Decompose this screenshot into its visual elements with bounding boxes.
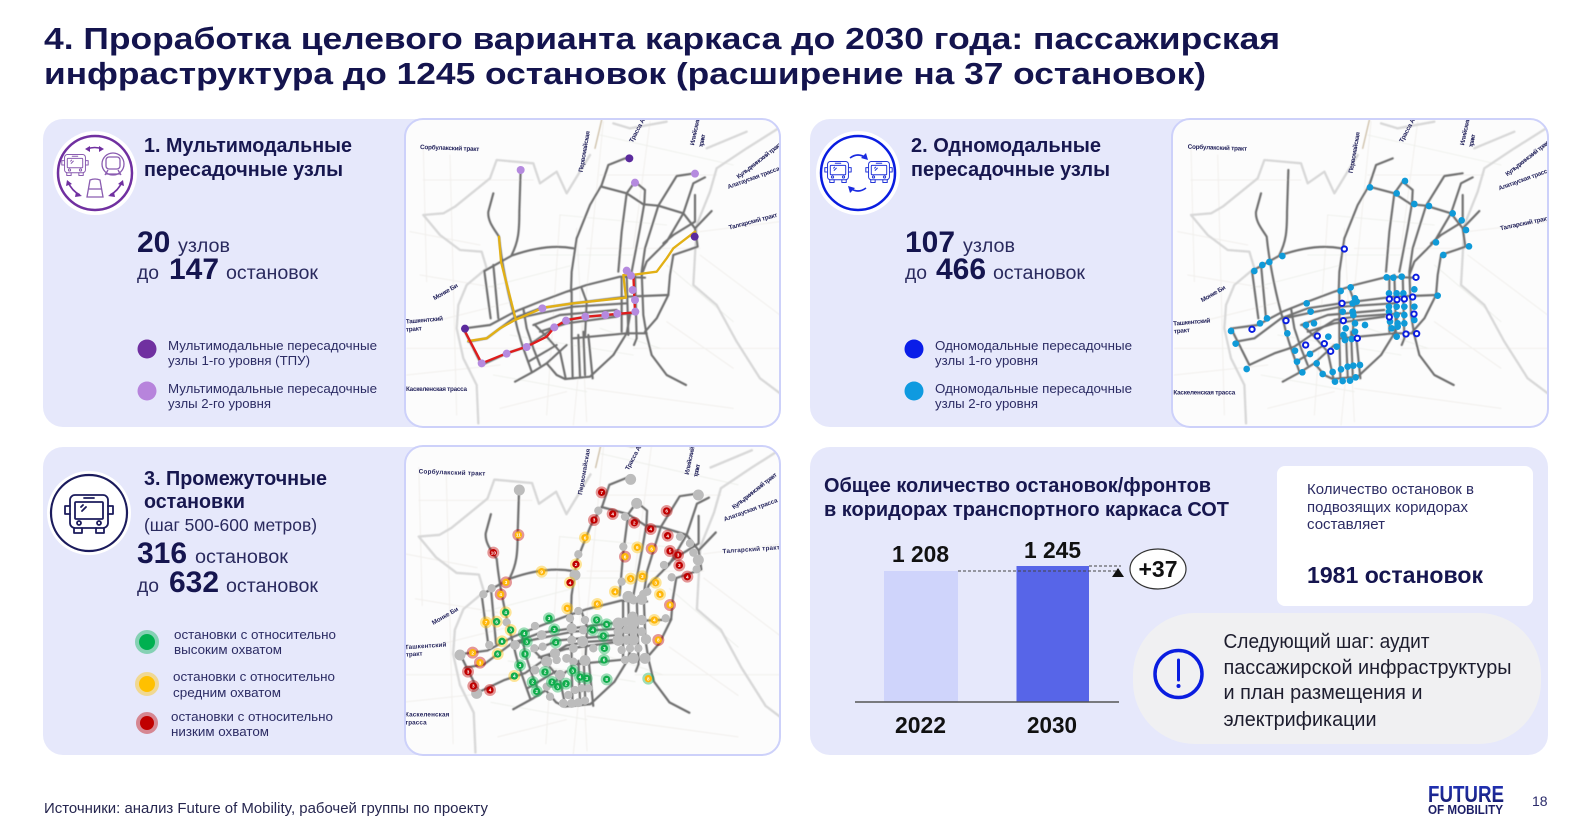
key numbers xyxy=(137,537,319,599)
callout: feeder corridors: составляет xyxy=(1307,517,1385,533)
coverage stops: 3 xyxy=(553,627,556,632)
coverage stops: 4 xyxy=(686,574,689,579)
coverage stops: 4 xyxy=(666,533,669,538)
road labels: Ташкентский xyxy=(405,640,447,651)
icon: single-mode hub xyxy=(816,131,900,215)
legend xyxy=(904,338,1132,411)
callout: feeder corridors: Количество остановок в xyxy=(1307,482,1474,498)
legend xyxy=(139,627,336,739)
road labels: Трасса Ал xyxy=(628,114,649,144)
coverage stops: 4 xyxy=(523,631,526,636)
coverage stops: 6 xyxy=(584,535,587,540)
heading: 1. Мультимодальные xyxy=(144,135,352,157)
legend: остановки с относительно xyxy=(174,627,336,642)
road labels: Первомайская xyxy=(576,448,592,495)
map: intermediate stops xyxy=(402,438,786,755)
coverage stops: 4 xyxy=(591,628,594,633)
callout: feeder corridors: 1981 остановок xyxy=(1307,562,1483,588)
legend: Мультимодальные пересадочные xyxy=(168,338,377,353)
road labels: Сорбулакский тракт xyxy=(419,467,486,478)
key numbers: узлов xyxy=(178,236,230,257)
road labels: Илийский xyxy=(683,446,697,475)
legend: высоким охватом xyxy=(174,642,282,657)
legend: остановки с относительно xyxy=(171,709,333,724)
coverage stops: 6 xyxy=(603,658,606,663)
key numbers: 147 xyxy=(169,253,219,286)
panel: single-mode hubs xyxy=(810,114,1552,427)
road labels: тракт xyxy=(1468,134,1477,148)
coverage stops: 2 xyxy=(633,520,636,525)
callout: next step: пассажирской инфраструктуры xyxy=(1224,657,1512,679)
road labels: Алатауская трасса xyxy=(727,165,781,191)
road labels: Сорбулакский тракт xyxy=(420,143,480,153)
level 2 hubs xyxy=(1228,178,1472,385)
heading: (шаг 500-600 метров) xyxy=(144,515,317,535)
road labels: Монке Би xyxy=(432,282,459,302)
key numbers: 632 xyxy=(169,566,219,599)
callout: feeder corridors: подвозящих коридорах xyxy=(1307,500,1469,516)
road labels: Трасса Ал xyxy=(1398,114,1419,144)
bar chart: 1 208 xyxy=(892,541,949,567)
key numbers: остановок xyxy=(226,576,319,597)
key numbers: до xyxy=(137,576,159,597)
bar chart: 1 245 xyxy=(1024,537,1081,563)
map: multimodal hubs xyxy=(405,114,783,427)
coverage stops: 2 xyxy=(551,680,554,685)
road labels: Талгарский тракт xyxy=(728,211,778,232)
page number: 18 xyxy=(1532,793,1548,809)
heading: пересадочные узлы xyxy=(911,159,1110,181)
coverage stops: 6 xyxy=(501,639,504,644)
key numbers: 107 xyxy=(905,226,955,259)
road labels: Каскеленская трасса xyxy=(406,386,467,393)
coverage stops: 3 xyxy=(571,668,574,673)
coverage stops: 3 xyxy=(677,553,680,558)
coverage stops: 2 xyxy=(531,680,534,685)
coverage stops: 5 xyxy=(595,618,598,623)
road labels: Монке Би xyxy=(431,606,460,627)
coverage stops: 3 xyxy=(472,684,475,689)
coverage stops: 6 xyxy=(495,619,498,624)
coverage stops: 10 xyxy=(491,550,496,555)
coverage stops: 4 xyxy=(554,640,557,645)
panel: multimodal hubs xyxy=(43,114,783,427)
key numbers: до xyxy=(137,263,159,284)
icon: exclamation xyxy=(1155,650,1202,698)
road labels: Сорбулакский тракт xyxy=(1188,143,1247,153)
coverage stops: 5 xyxy=(605,622,608,627)
heading xyxy=(911,135,1110,181)
road labels: Илийский xyxy=(688,117,702,146)
road labels: Талгарский тракт xyxy=(722,543,780,555)
road labels: тракт xyxy=(406,651,423,659)
road labels xyxy=(1173,114,1552,396)
road labels: тракт xyxy=(1174,327,1190,335)
coverage stops: 8 xyxy=(657,638,660,643)
key numbers: 316 xyxy=(137,537,187,570)
coverage stops: 3 xyxy=(678,563,681,568)
key numbers xyxy=(905,226,1086,286)
coverage stops: 6 xyxy=(624,554,627,559)
hubs xyxy=(461,154,699,367)
road labels: Первомайская xyxy=(577,130,592,173)
coverage stops: 2 xyxy=(544,670,547,675)
callout: next step: электрификации xyxy=(1224,709,1376,731)
road labels: Монке Би xyxy=(1200,284,1227,304)
key numbers: остановок xyxy=(226,263,319,284)
road labels: Каскеленская трасса xyxy=(1173,389,1236,396)
heading: Общее количество остановок/фронтов xyxy=(824,475,1211,497)
key numbers xyxy=(137,226,319,286)
coverage stops: 4 xyxy=(569,580,572,585)
road labels xyxy=(405,114,783,393)
coverage stops: 3 xyxy=(519,663,522,668)
coverage stops: 2 xyxy=(535,689,538,694)
heading xyxy=(144,468,327,535)
panel: total stops xyxy=(810,447,1548,755)
bar chart: 2022 xyxy=(895,712,946,738)
road labels: Трасса Ал xyxy=(624,442,645,472)
road labels: Илийский xyxy=(1458,117,1472,146)
legend: Одномодальные пересадочные xyxy=(935,381,1132,396)
key numbers: до xyxy=(905,263,927,284)
bar chart: 2030 xyxy=(1027,712,1077,738)
coverage stops: 3 xyxy=(467,669,470,674)
road labels: Кульджинский тракт xyxy=(730,471,779,511)
callout: next step xyxy=(1133,613,1541,744)
coverage stops: 4 xyxy=(653,618,656,623)
heading xyxy=(144,135,352,181)
coverage stops: 6 xyxy=(636,545,639,550)
coverage stops: 6 xyxy=(650,546,653,551)
road labels: Ташкентский xyxy=(1173,316,1211,328)
delta callout: +37 xyxy=(1138,556,1178,582)
coverage stops: 5 xyxy=(659,592,662,597)
road labels xyxy=(405,442,780,727)
heading: 3. Промежуточные xyxy=(144,468,327,490)
coverage stops: 9 xyxy=(540,569,543,574)
coverage stops: 4 xyxy=(579,675,582,680)
key numbers: 20 xyxy=(137,226,170,259)
coverage stops: 5 xyxy=(669,549,672,554)
coverage stops: 2 xyxy=(565,681,568,686)
coverage stops: 6 xyxy=(496,652,499,657)
coverage stops: 3 xyxy=(525,639,528,644)
coverage stops: 4 xyxy=(611,512,614,517)
coverage stops: 3 xyxy=(602,634,605,639)
road labels: трасса xyxy=(405,720,427,727)
level 1 hubs xyxy=(1249,246,1419,354)
legend: узлы 2-го уровня xyxy=(935,396,1038,411)
callout: feeder corridors xyxy=(1277,466,1533,606)
coverage stops: 2 xyxy=(575,562,578,567)
coverage stops: 3 xyxy=(479,660,482,665)
coverage stops: 3 xyxy=(556,684,559,689)
heading: остановки xyxy=(144,491,245,513)
legend: узлы 2-го уровня xyxy=(168,396,271,411)
legend: остановки с относительно xyxy=(173,669,335,684)
coverage stops: 3 xyxy=(593,518,596,523)
heading: пересадочные узлы xyxy=(144,159,343,181)
key numbers: узлов xyxy=(963,236,1015,257)
coverage stops: 3 xyxy=(629,576,632,581)
title: инфраструктура до 1245 остановок (расширение на 37 остановок) xyxy=(44,56,1206,91)
road labels: Первомайская xyxy=(1347,131,1362,174)
legend: Одномодальные пересадочные xyxy=(935,338,1132,353)
callout: next step: Следующий шаг: аудит xyxy=(1224,631,1430,653)
coverage stops: 6 xyxy=(596,602,599,607)
coverage stops: 8 xyxy=(669,603,672,608)
delta callout xyxy=(1112,549,1186,589)
legend xyxy=(138,338,377,411)
road labels: Талгарский тракт xyxy=(1499,214,1550,232)
key numbers: 466 xyxy=(936,253,986,286)
road labels: Алатауская трасса xyxy=(723,497,779,523)
callout: next step: и план размещения и xyxy=(1224,682,1422,704)
coverage stops: 3 xyxy=(641,574,644,579)
road labels: тракт xyxy=(692,463,702,478)
coverage stops: 2 xyxy=(471,650,474,655)
coverage stops: 3 xyxy=(505,580,508,585)
heading: 2. Одномодальные xyxy=(911,135,1101,157)
heading xyxy=(824,475,1229,521)
title xyxy=(44,21,1280,91)
logo: FUTURE xyxy=(1428,781,1504,807)
coverage stops: 3 xyxy=(603,646,606,651)
coverage stops: 4 xyxy=(499,592,502,597)
sources: Источники: анализ Future of Mobility, рабочей группы по проекту xyxy=(44,801,489,817)
coverage stops: 3 xyxy=(654,580,657,585)
road labels: Ташкентский xyxy=(405,314,443,326)
icon: bus xyxy=(47,471,131,555)
legend: средним охватом xyxy=(173,685,281,700)
coverage stops: 11 xyxy=(516,533,521,538)
coverage stops: 7 xyxy=(600,490,603,495)
bar chart xyxy=(855,537,1186,738)
grey stops xyxy=(456,475,703,707)
coverage stops: 5 xyxy=(566,606,569,611)
heading: в коридорах транспортного каркаса СОТ xyxy=(824,499,1229,521)
coverage stops: 3 xyxy=(509,628,512,633)
legend: узлы 1-го уровня (ТПУ) xyxy=(168,353,310,368)
logo xyxy=(1428,781,1504,817)
coverage stops xyxy=(464,489,691,695)
coverage stops: 8 xyxy=(605,677,608,682)
legend: Мультимодальные пересадочные xyxy=(168,381,377,396)
coverage stops: 7 xyxy=(485,620,488,625)
title: 4. Проработка целевого варианта каркаса до 2030 года: пассажирская xyxy=(44,21,1280,56)
logo: OF MOBILITY xyxy=(1428,802,1503,817)
coverage stops: 4 xyxy=(614,589,617,594)
legend: узлы 1-го уровня xyxy=(935,353,1038,368)
coverage stops: 3 xyxy=(585,676,588,681)
key numbers: остановок xyxy=(993,263,1086,284)
coverage stops: 4 xyxy=(649,527,652,532)
coverage stops: 4 xyxy=(504,610,507,615)
coverage stops: 4 xyxy=(513,674,516,679)
coverage stops: 4 xyxy=(489,688,492,693)
road labels: тракт xyxy=(406,325,422,334)
road labels: тракт xyxy=(698,134,707,148)
road labels: Алатауская трасса xyxy=(1498,167,1552,192)
coverage stops: 3 xyxy=(548,616,551,621)
corridors xyxy=(463,232,695,363)
road labels: Кульджинский тракт xyxy=(735,140,783,181)
coverage stops: 6 xyxy=(665,509,668,514)
panel: intermediate stops xyxy=(43,438,786,755)
icon: multimodal hub xyxy=(53,131,137,215)
road labels: Кульджинский тракт xyxy=(1504,138,1552,178)
coverage stops: 8 xyxy=(647,676,650,681)
map: single-mode hubs xyxy=(1172,114,1552,427)
key numbers: остановок xyxy=(195,547,289,568)
road labels: Каскеленская xyxy=(405,712,450,719)
legend: низким охватом xyxy=(171,724,269,739)
coverage stops: 3 xyxy=(524,652,527,657)
